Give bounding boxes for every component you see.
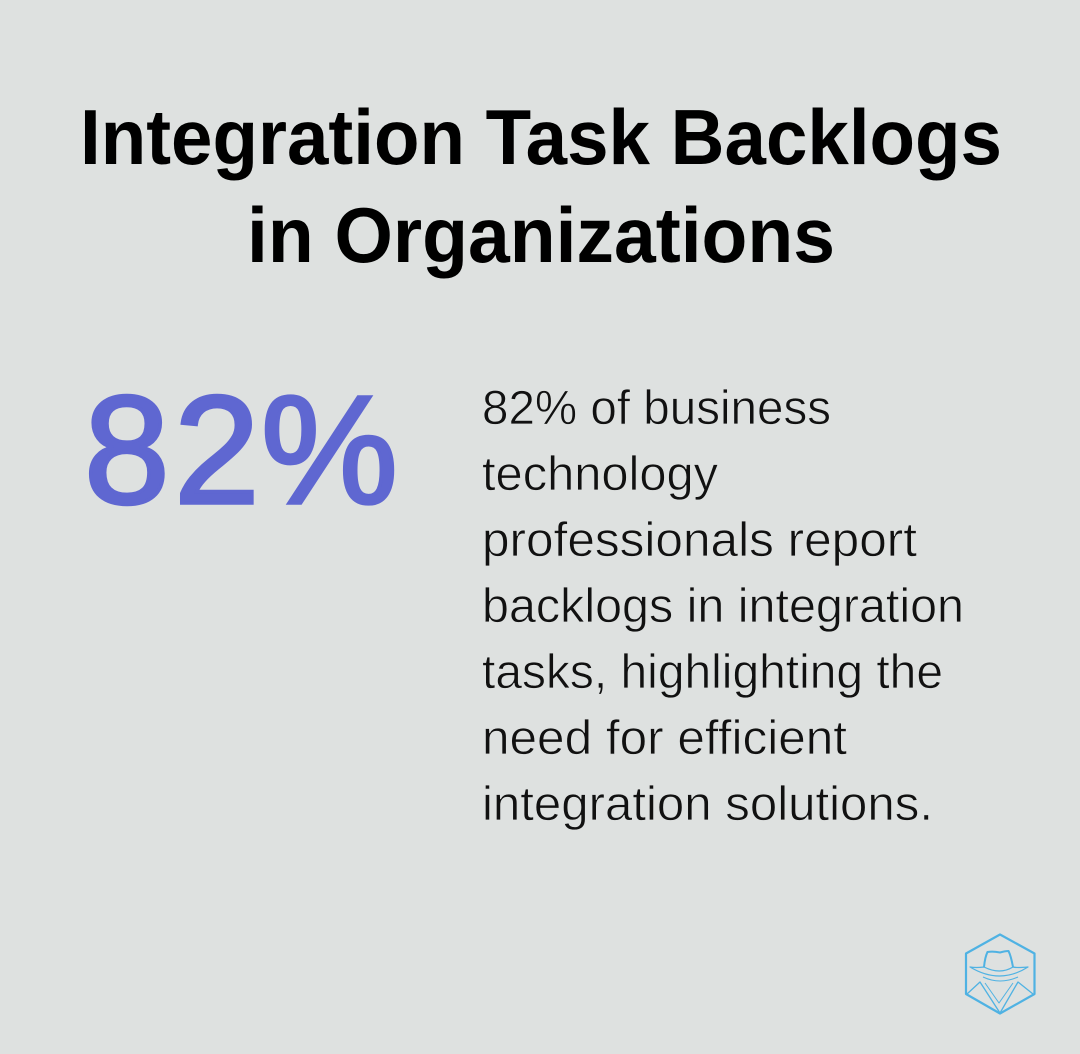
description text: 82% of business	[482, 382, 831, 435]
description text: integration solutions.	[482, 778, 933, 831]
title: Integration Task Backlogs	[80, 93, 1002, 181]
description text	[482, 382, 964, 831]
title: in Organizations	[247, 191, 835, 279]
icon: hexagon spy logo	[966, 934, 1034, 1014]
description text: backlogs in integration	[482, 580, 964, 633]
description text: tasks, highlighting the	[482, 646, 943, 699]
description text: need for efficient	[482, 712, 847, 765]
description text: professionals report	[482, 514, 917, 567]
description text: technology	[482, 448, 718, 501]
big statistic: 82%: 82%	[84, 364, 398, 536]
title	[80, 93, 1002, 279]
